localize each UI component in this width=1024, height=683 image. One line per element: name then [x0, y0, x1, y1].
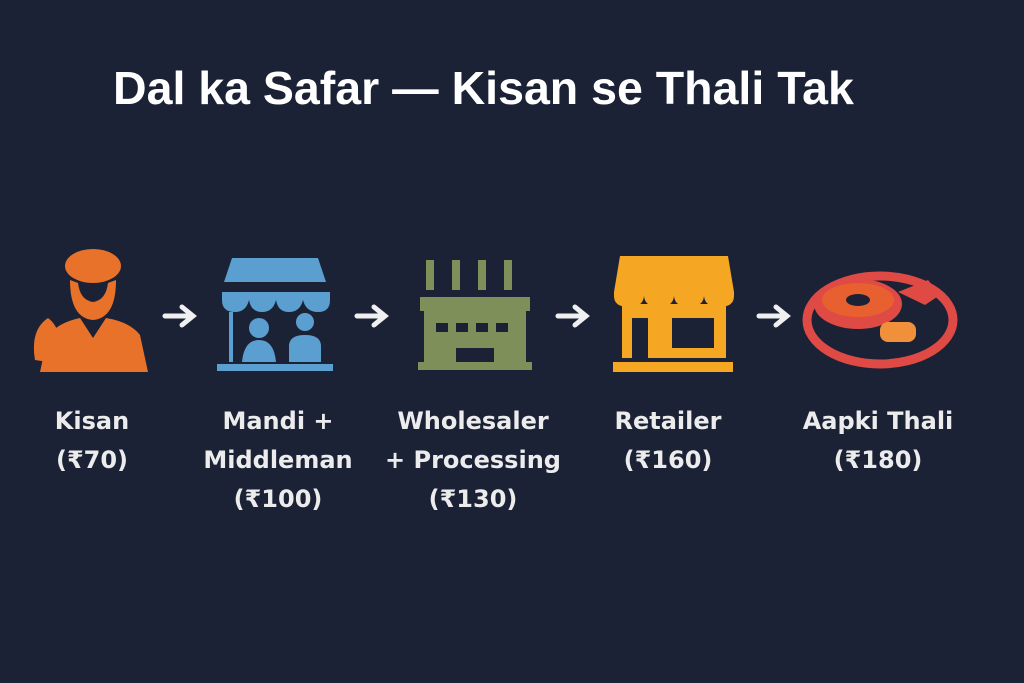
icon: thali — [807, 276, 953, 364]
label: Thali — [802, 407, 953, 474]
label: Mandi: (₹100) — [234, 485, 322, 513]
label: Wholesaler: + Processing — [385, 446, 561, 474]
icon: retail shop — [613, 256, 734, 372]
icon: farmer — [34, 249, 148, 372]
arrow 4 — [759, 307, 787, 325]
label: Retailer — [614, 407, 722, 474]
label: Kisan: Kisan — [55, 407, 129, 435]
label: Mandi: Middleman — [203, 446, 353, 474]
label: Thali: (₹180) — [834, 446, 922, 474]
label: Thali: Aapki Thali — [803, 407, 953, 435]
label: Retailer: (₹160) — [624, 446, 712, 474]
label: Wholesaler — [385, 407, 561, 513]
icon: mandi stall — [217, 258, 333, 371]
title: Dal ka Safar — Kisan se Thali Tak — [113, 62, 854, 114]
label: Kisan — [55, 407, 129, 474]
arrow 2 — [357, 307, 385, 325]
label: Mandi — [203, 407, 353, 513]
label: Mandi: Mandi + — [222, 407, 334, 435]
icon: factory — [418, 260, 532, 370]
label: Wholesaler: Wholesaler — [397, 407, 549, 435]
label: Wholesaler: (₹130) — [429, 485, 517, 513]
label: Retailer: Retailer — [614, 407, 722, 435]
arrow 1 — [165, 307, 193, 325]
arrow 3 — [558, 307, 586, 325]
label: Kisan: (₹70) — [56, 446, 128, 474]
